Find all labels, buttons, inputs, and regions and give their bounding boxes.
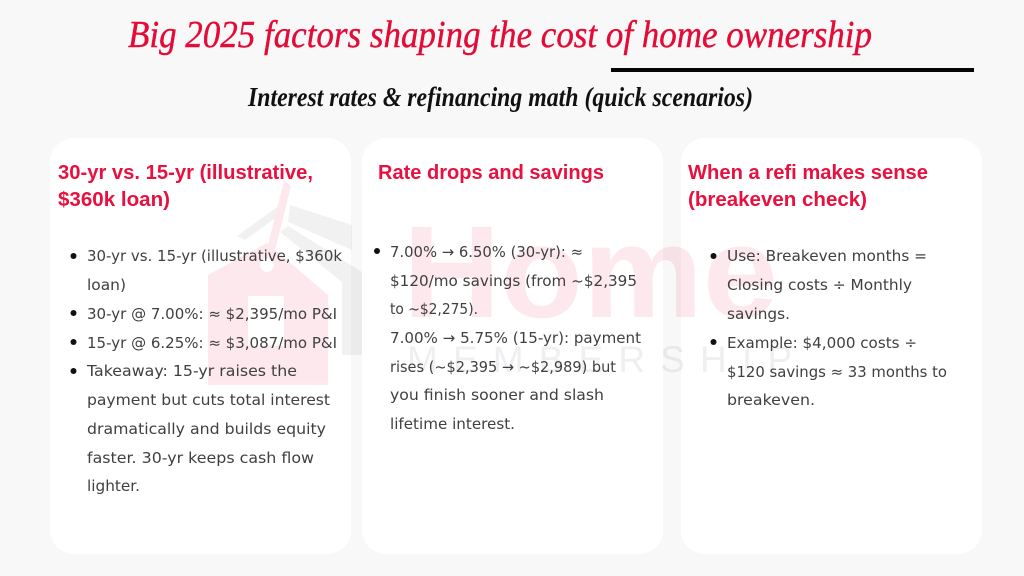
heading: when a refi makes sense xyxy=(688,162,928,211)
bullet list: rate drops: to ~$2,275). xyxy=(390,300,478,318)
heading: 30-yr vs 15-yr: $360k loan) xyxy=(58,189,170,211)
bullet list: breakeven: $120 savings ≈ 33 months to xyxy=(727,363,947,381)
heading: 30-yr vs 15-yr xyxy=(58,162,313,211)
watermark: home membership logo xyxy=(208,180,792,385)
bullet list: breakeven: Closing costs ÷ Monthly xyxy=(727,276,912,294)
bullet list: rate drops: 7.00% → 6.50% (30-yr): ≈ xyxy=(390,243,583,261)
bullet list: breakeven: Use: Breakeven months = xyxy=(727,247,927,265)
bullet list: 30-yr vs 15-yr: Takeaway: 15-yr raises the xyxy=(86,362,297,380)
bullet list: 30-yr vs 15-yr: faster. 30-yr keeps cash flow xyxy=(87,449,314,467)
bullet list: rate drops: 7.00% → 5.75% (15-yr): payment xyxy=(390,329,641,347)
title: Big 2025 factors shaping the cost of home ownership xyxy=(128,14,872,56)
heading: rate drops: Rate drops and savings xyxy=(378,162,604,184)
subtitle: Interest rates & refinancing math (quick scenarios) xyxy=(247,82,753,112)
wordmark: Home: Home xyxy=(403,198,778,345)
bullet list: rate drops: lifetime interest. xyxy=(390,415,515,433)
title underline xyxy=(611,68,974,72)
panel: when a refi makes sense xyxy=(681,138,982,554)
bullet list: breakeven: savings. xyxy=(727,305,790,323)
bullet list: rate drops: $120/mo savings (from ~$2,395 xyxy=(390,272,637,290)
heading: when a refi makes sense: (breakeven check) xyxy=(688,189,867,211)
bullet list: 30-yr vs 15-yr: 30-yr @ 7.00%: ≈ $2,395/mo P&I xyxy=(87,305,337,323)
heading: when a refi makes sense: When a refi makes sense xyxy=(688,162,928,184)
bullet list: breakeven: breakeven. xyxy=(727,391,815,409)
wordmark: Membership: MEMBERSHIP xyxy=(407,339,792,380)
panel: rate drops and savings xyxy=(362,138,663,554)
heading: 30-yr vs 15-yr: 30-yr vs. 15-yr (illustrative, xyxy=(58,162,313,184)
bullet list: 30-yr vs 15-yr: loan) xyxy=(87,276,126,294)
bullet list: 30-yr vs 15-yr: 15-yr @ 6.25%: ≈ $3,087/mo P&I xyxy=(87,334,337,352)
bullet list: rate drops: rises (~$2,395 → ~$2,989) but xyxy=(390,358,616,376)
bullet list: breakeven: Example: $4,000 costs ÷ xyxy=(727,334,917,352)
bullet list: rate drops xyxy=(374,243,641,433)
panel: 30-yr vs 15-yr xyxy=(50,138,351,554)
icon: house tag xyxy=(208,180,362,385)
bullet list: 30-yr vs 15-yr: lighter. xyxy=(87,477,140,495)
bullet list: breakeven xyxy=(710,247,947,409)
bullet list: 30-yr vs 15-yr xyxy=(70,247,342,495)
bullet list: 30-yr vs 15-yr: payment but cuts total interest xyxy=(87,391,330,409)
bullet list: 30-yr vs 15-yr: dramatically and builds equity xyxy=(87,420,326,438)
bullet list: 30-yr vs 15-yr: 30-yr vs. 15-yr (illustrative, $360k xyxy=(87,247,342,265)
bullet list: rate drops: you finish sooner and slash xyxy=(390,386,604,404)
